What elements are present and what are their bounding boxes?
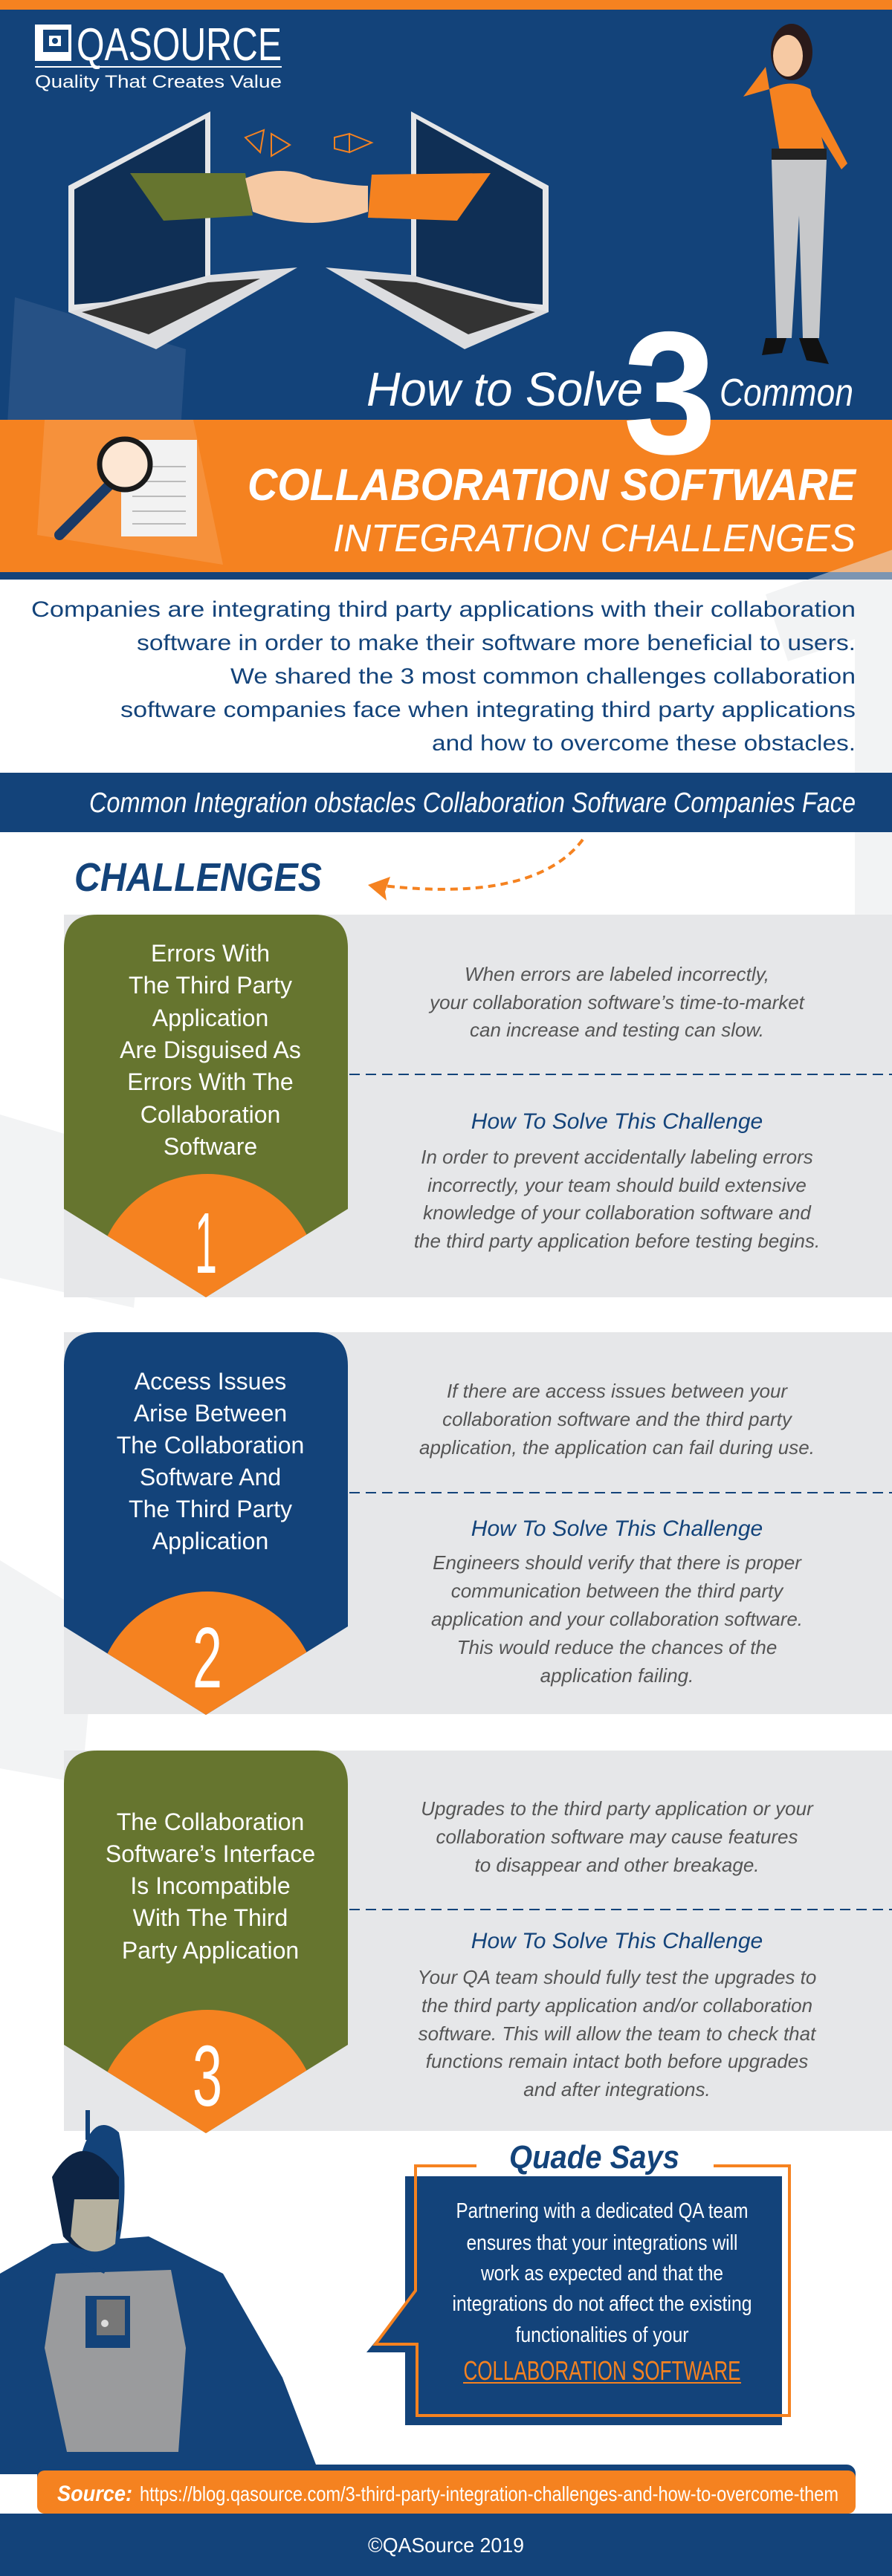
text: solution 1 [414, 1109, 820, 1252]
text: solution 3: the third party application and/or collaboration [421, 1994, 812, 2017]
badge 2: The Collaboration [117, 1432, 304, 1459]
footer [0, 2514, 892, 2576]
orange title band [0, 420, 892, 580]
watermark shapes [0, 550, 892, 1783]
text: problem 1: your collaboration software’s time-to-market [428, 991, 806, 1013]
badge 3: 3 [193, 2028, 222, 2124]
source bar [37, 2465, 856, 2514]
illustration: laptops handshake [68, 111, 549, 349]
text: solution 3: software. This will allow the team to check that [418, 2022, 817, 2045]
text: problem 3: collaboration software may cause features [436, 1826, 798, 1848]
header background [0, 0, 892, 580]
panel: challenge 1 [64, 915, 892, 1297]
panel: challenge 2 [64, 1332, 892, 1715]
big number 3: 3 [623, 295, 717, 490]
text: problem 1 [428, 963, 806, 1041]
badge 2: Software And [140, 1464, 281, 1490]
logo: QASOURCE [77, 19, 282, 71]
badge 2: The Third Party [129, 1496, 292, 1522]
logo: Quality That Creates Value [35, 72, 282, 92]
text: problem 3: Upgrades to the third party application or your [421, 1797, 814, 1820]
callout: Quade Says [366, 2139, 789, 2425]
badge 1: Are Disguised As [120, 1036, 301, 1063]
callout: Quade Says: work as expected and that the [480, 2262, 723, 2285]
badge 1: Collaboration [140, 1101, 280, 1128]
badge 1: Application [152, 1005, 268, 1031]
panel: challenge 3 [64, 1751, 892, 2133]
badge 1 [64, 915, 348, 1297]
icon: magnifier on document [59, 439, 197, 536]
text: problem 3: to disappear and other breakage. [474, 1854, 760, 1876]
title: collaboration software integration challenges: INTEGRATION CHALLENGES [333, 517, 856, 560]
logo [35, 19, 282, 92]
callout: Quade Says: COLLABORATION SOFTWARE [464, 2355, 740, 2386]
text: solution 2 [431, 1516, 803, 1687]
text: solution 3: functions remain intact both before upgrades [426, 2050, 808, 2072]
badge 1: 1 [195, 1195, 217, 1291]
illustration: superhero Quade [0, 2110, 320, 2474]
intro text: software companies face when integrating third party applications [120, 698, 856, 722]
arrow: dashed curved [368, 840, 583, 901]
text: solution 2: Engineers should verify that there is proper [433, 1551, 802, 1574]
intro text: software in order to make their software more beneficial to users. [137, 631, 856, 655]
text: solution 1: knowledge of your collaboration software and [423, 1201, 812, 1224]
badge 3: The Collaboration [117, 1808, 304, 1835]
badge 3: With The Third [133, 1904, 288, 1931]
title: How to Solve 3 Common: How to Solve [366, 363, 643, 416]
title: collaboration software integration challenges: COLLABORATION SOFTWARE [248, 460, 857, 510]
text: solution 2: application and your collaboration software. [431, 1608, 803, 1630]
badge 1: Software [164, 1133, 257, 1160]
callout: Quade Says: Quade Says [509, 2139, 679, 2176]
badge 3: Party Application [122, 1937, 299, 1964]
text: problem 3 [421, 1797, 814, 1876]
illustration: woman on phone [743, 24, 847, 364]
text: solution 1: incorrectly, your team should build extensive [427, 1174, 807, 1196]
callout: Quade Says: integrations do not affect the existing [452, 2292, 752, 2316]
source bar: Source: [57, 2482, 132, 2506]
badge 2: 2 [193, 1609, 222, 1706]
heading band [0, 773, 892, 832]
callout: Quade Says: functionalities of your [516, 2323, 689, 2347]
text: problem 2 [419, 1380, 815, 1459]
badge 1: Errors With The [127, 1068, 294, 1095]
text: solution 1: How To Solve This Challenge [471, 1109, 763, 1134]
badge 1: Errors With [151, 940, 270, 967]
title: How to Solve 3 Common [366, 363, 853, 416]
badge 2: Application [152, 1528, 268, 1554]
badge 3 [64, 1751, 348, 2133]
text: solution 1: In order to prevent accidentally labeling errors [421, 1146, 813, 1168]
badge 1: The Third Party [129, 972, 292, 999]
badge 3: Software’s Interface [106, 1840, 315, 1867]
title: collaboration software integration challenges [248, 460, 857, 560]
text: solution 3 [418, 1929, 817, 2100]
text: solution 2: application failing. [540, 1664, 694, 1687]
callout: Quade Says: Partnering with a dedicated QA team [456, 2199, 748, 2223]
badge 2: Arise Between [134, 1400, 287, 1427]
text: problem 1: When errors are labeled incorrectly, [465, 963, 769, 985]
text: solution 3: Your QA team should fully test the upgrades to [418, 1966, 816, 1988]
text: solution 2: How To Solve This Challenge [471, 1516, 763, 1541]
intro text: We shared the 3 most common challenges collaboration [230, 664, 856, 689]
intro text: Companies are integrating third party applications with their collaboration [31, 597, 856, 622]
text: solution 3: How To Solve This Challenge [471, 1929, 763, 1953]
text: problem 2: If there are access issues between your [447, 1380, 788, 1402]
text: problem 2: application, the application can fail during use. [419, 1436, 815, 1459]
intro text [31, 597, 856, 756]
CHALLENGES heading: CHALLENGES [74, 855, 322, 900]
text: solution 3: and after integrations. [523, 2078, 711, 2100]
text: problem 2: collaboration software and the third party [442, 1408, 793, 1430]
callout: Quade Says: ensures that your integrations will [467, 2231, 737, 2255]
text: solution 2: communication between the third party [451, 1580, 784, 1602]
text: solution 1: the third party application before testing begins. [414, 1230, 820, 1252]
intro text: and how to overcome these obstacles. [432, 731, 856, 756]
badge 2 [64, 1332, 348, 1715]
text: solution 2: This would reduce the chances of the [457, 1636, 777, 1658]
badge 2: Access Issues [135, 1368, 286, 1395]
badge 3: Is Incompatible [130, 1872, 291, 1899]
footer: ©QASource 2019 [368, 2534, 524, 2557]
title: How to Solve 3 Common: Common [720, 372, 853, 415]
text: problem 1: can increase and testing can slow. [470, 1019, 764, 1041]
